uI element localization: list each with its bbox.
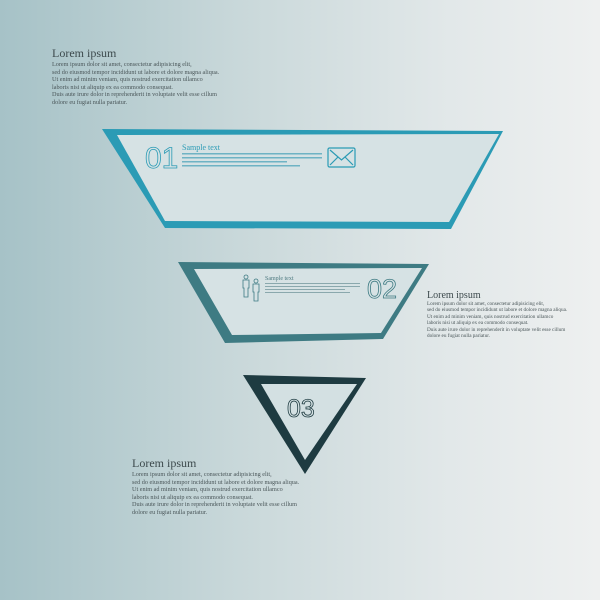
shape 1 (102, 129, 503, 229)
icon: people (243, 275, 259, 301)
text block: bottom left: Ut enim ad minim veniam, quis nostrud exercitation ullamco (132, 486, 283, 493)
text block: top left: laboris nisi ut aliquip ex ea commodo consequat. (52, 84, 173, 91)
text block: right: sed do eiusmod tempor incididunt ut labore et dolore magna aliqua. (427, 307, 567, 313)
text block: bottom left (132, 456, 299, 516)
text block: bottom left: sed do eiusmod tempor incididunt ut labore et dolore magna aliqua. (132, 479, 299, 486)
text block: right: Lorem ipsum (427, 290, 481, 301)
shape 3 (243, 375, 366, 474)
text block: bottom left: Lorem ipsum (132, 456, 196, 470)
text block: bottom left: dolore eu fugiat nulla pariatur. (132, 509, 207, 516)
sample text 2: Sample text (265, 276, 294, 282)
text block: bottom left: laboris nisi ut aliquip ex ea commodo consequat. (132, 494, 253, 501)
text block: right: Ut enim ad minim veniam, quis nostrud exercitation ullamco (427, 314, 553, 320)
text block: right: Duis aute irure dolor in reprehenderit in voluptate velit esse cillum (427, 327, 565, 333)
text block: top left: Duis aute irure dolor in reprehenderit in voluptate velit esse cillum (52, 91, 217, 98)
text block: top left (52, 46, 219, 106)
number 03: 03 (287, 395, 315, 423)
sample text 2 (265, 276, 360, 293)
number 01: 01 (145, 142, 178, 175)
text block: top left: Lorem ipsum (52, 46, 116, 60)
icon: envelope (328, 148, 355, 167)
number 02: 02 (367, 274, 397, 304)
text block: top left: Ut enim ad minim veniam, quis nostrud exercitation ullamco (52, 76, 203, 83)
text block: right (427, 290, 567, 339)
text block: bottom left: Lorem ipsum dolor sit amet, consectetur adipisicing elit, (132, 471, 272, 478)
text block: bottom left: Duis aute irure dolor in reprehenderit in voluptate velit esse cillum (132, 501, 297, 508)
sample text 1 (182, 143, 322, 166)
text block: top left: dolore eu fugiat nulla pariatur. (52, 99, 127, 106)
text block: top left: sed do eiusmod tempor incididunt ut labore et dolore magna aliqua. (52, 69, 219, 76)
text block: right: dolore eu fugiat nulla pariatur. (427, 333, 490, 339)
sample text 1: Sample text (182, 143, 221, 152)
text block: right: laboris nisi ut aliquip ex ea commodo consequat. (427, 320, 528, 326)
text block: top left: Lorem ipsum dolor sit amet, consectetur adipisicing elit, (52, 61, 192, 68)
shape 2 (178, 262, 429, 343)
text block: right: Lorem ipsum dolor sit amet, consectetur adipisicing elit, (427, 301, 544, 307)
